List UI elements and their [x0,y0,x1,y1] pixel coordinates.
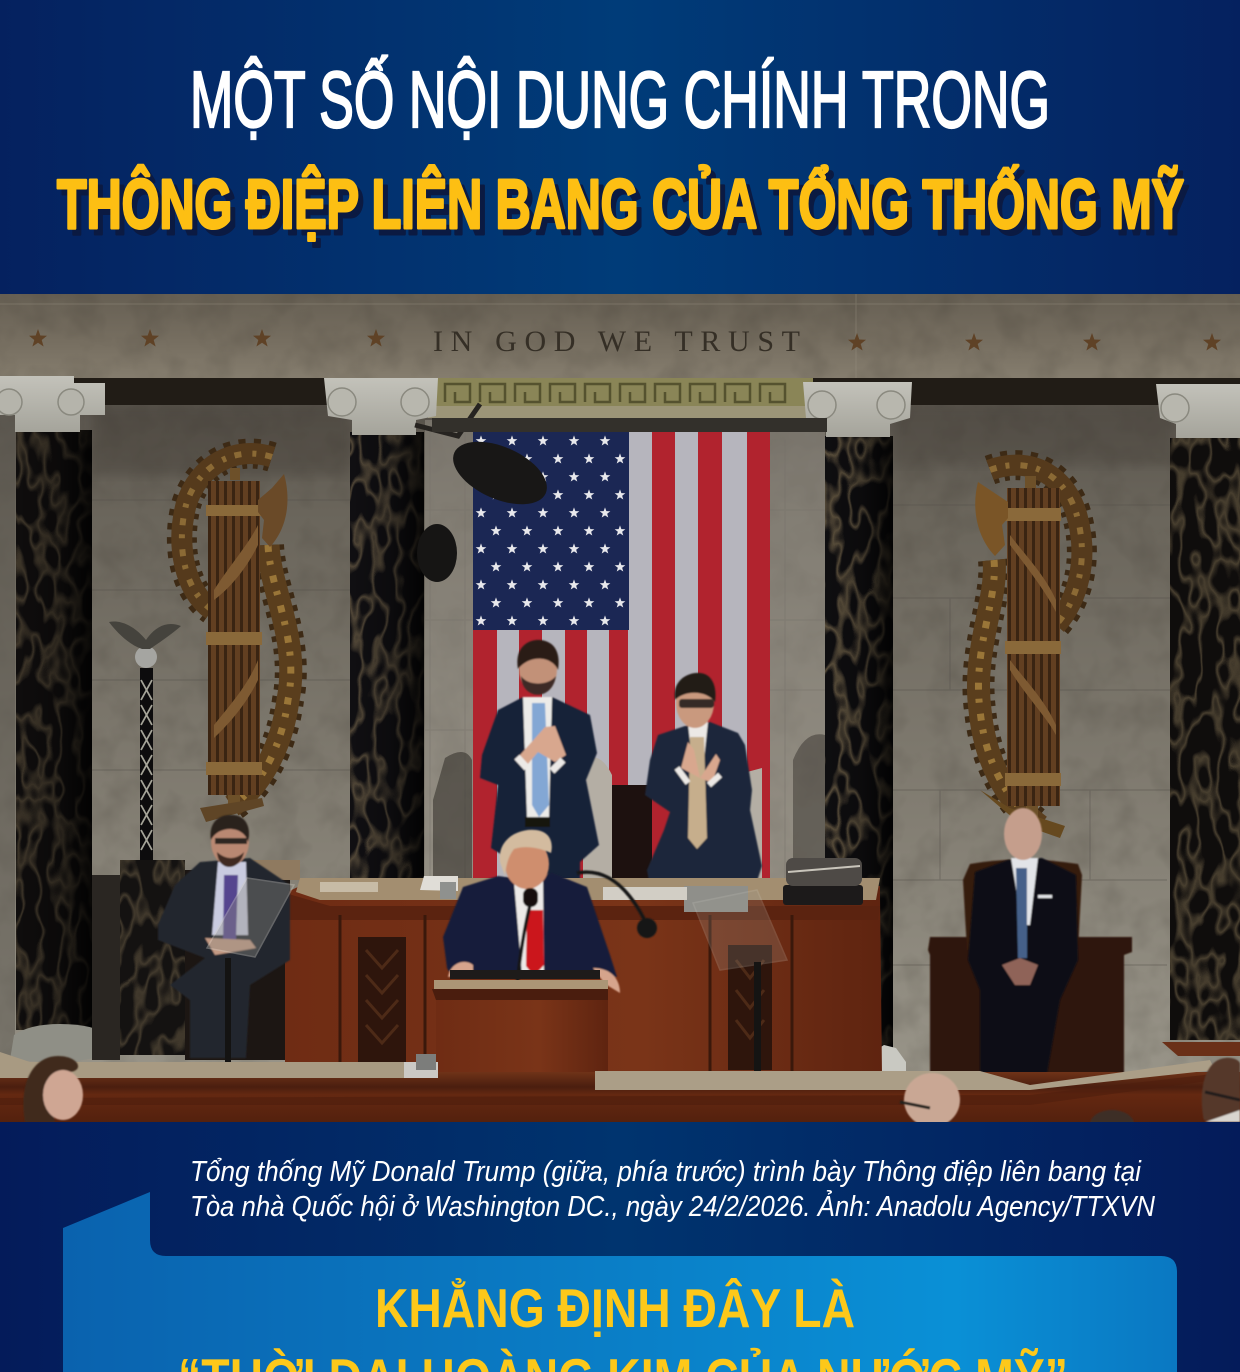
section heading: KHẲNG ĐỊNH ĐÂY LÀ [375,1277,855,1339]
camera mount [415,404,480,582]
blue section panel [63,1192,1177,1372]
desk instrument [783,885,863,905]
chamber rail [0,1042,1240,1122]
person: main speaker [443,830,657,993]
person: seated left [158,815,290,1058]
stone wall [0,405,1240,1072]
wreath right [978,465,1082,826]
caption band [0,1122,1240,1372]
mace [109,621,181,883]
bronze fasces left [182,454,291,822]
frieze stars [29,329,1221,350]
column capitals [0,376,1240,438]
person: standing left clapping [480,640,599,885]
section heading [178,1277,1068,1372]
shadows on wall [433,734,825,880]
chairs behind dais [583,757,762,887]
lectern [432,970,608,1072]
camera on flag [453,442,547,504]
teleprompter left [206,877,295,1062]
frieze inscription: IN GOD WE TRUST [433,325,800,358]
wreath left [182,454,291,806]
bronze fasces right [975,465,1082,838]
flag [432,418,827,890]
left seating area [92,860,300,1060]
header band [0,0,1240,294]
caption text: Tổng thống Mỹ Donald Trump (giữa, phía trước) trình bày Thông điệp liên bang tại [190,1156,1142,1188]
front-row attendees [23,1055,1240,1122]
photo: president addressing Congress [0,294,1240,1138]
marble columns [10,430,1240,1073]
caption text [190,1156,1155,1223]
frieze [0,294,1240,405]
desk [285,858,882,1075]
greek key band [428,378,813,418]
person: standing right clapping [645,673,762,887]
teleprompter right [692,889,788,1071]
right seating area [928,860,1132,1075]
person: seated right [968,808,1078,1085]
